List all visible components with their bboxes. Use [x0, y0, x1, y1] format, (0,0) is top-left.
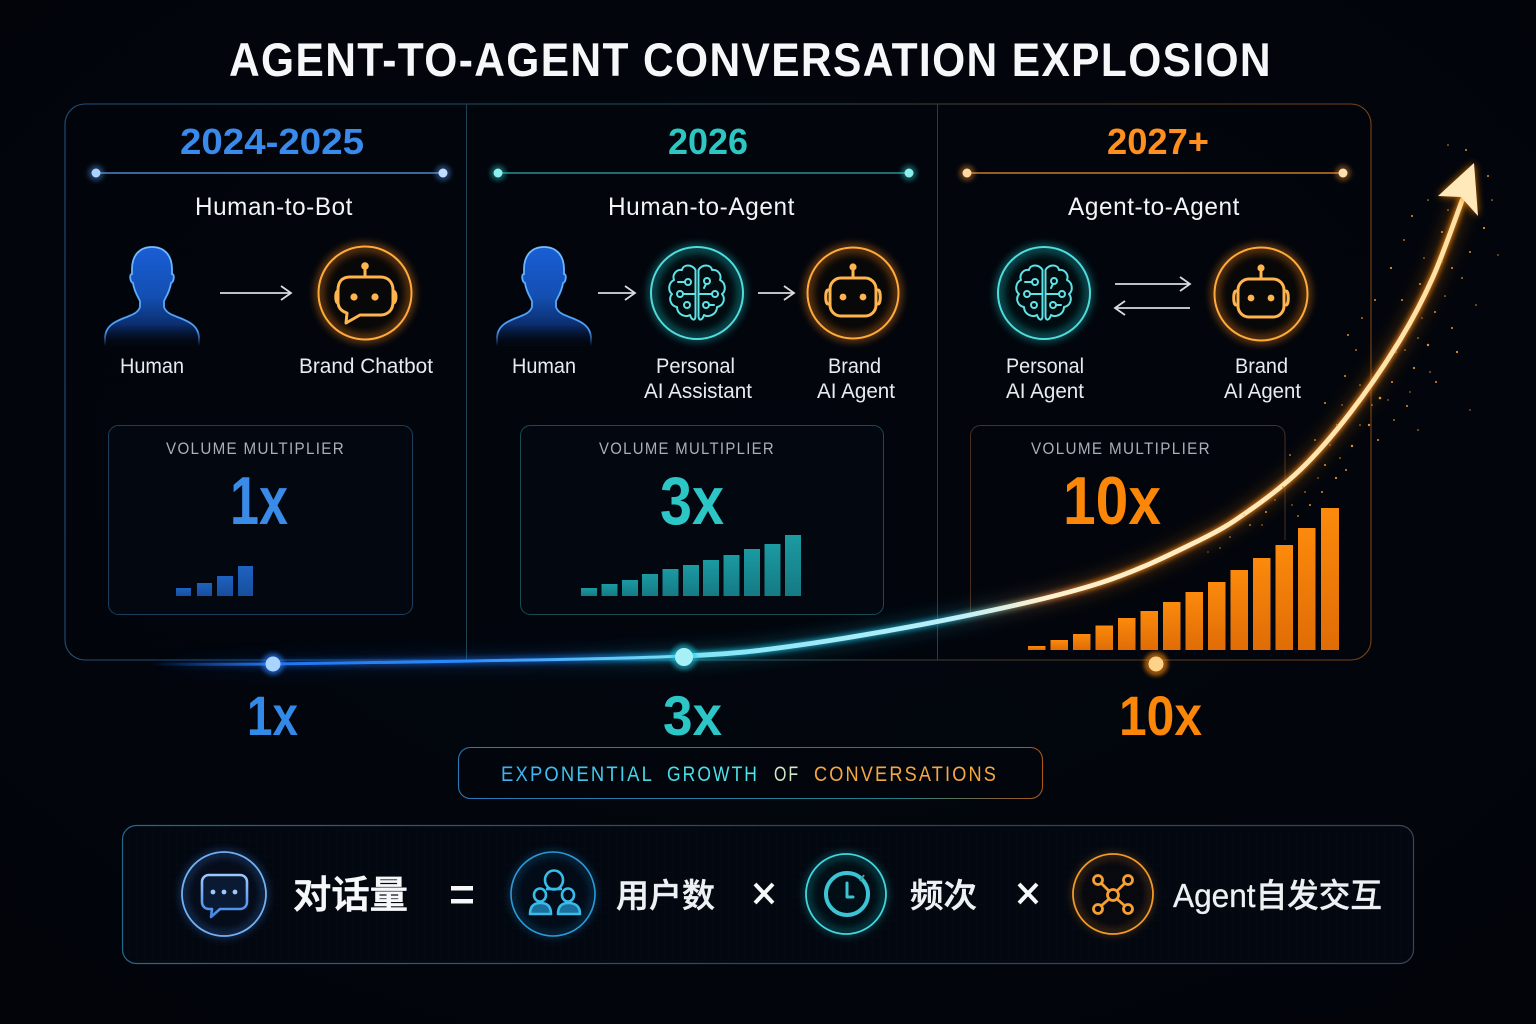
personal agent label: Personal — [1006, 355, 1084, 378]
exponential growth caption: GROWTH — [667, 763, 759, 786]
equals sign — [451, 886, 473, 904]
timeline value 10x: 10x — [1119, 684, 1202, 747]
column divider 2 — [936, 104, 938, 660]
exponential growth curve with arrow — [150, 144, 1499, 664]
year rule with end dots — [490, 165, 917, 181]
title: AGENT-TO-AGENT CONVERSATION EXPLOSION — [229, 33, 1272, 86]
exponential growth caption — [458, 748, 1042, 798]
column divider 1 — [466, 104, 468, 660]
multiplier value: 10x — [1063, 463, 1161, 539]
multiplier value: 1x — [230, 463, 288, 539]
bar chart — [176, 566, 253, 596]
icon: chat bubble — [182, 852, 266, 936]
icon: users — [511, 852, 595, 936]
arrow: human to chatbot — [220, 286, 291, 300]
volume multiplier card — [520, 426, 884, 614]
assistant label: Personal — [656, 355, 735, 378]
icon: personal AI assistant — [651, 247, 743, 339]
multiply sign — [755, 884, 773, 903]
bar chart — [1028, 508, 1339, 650]
timeline marker 1x — [262, 653, 284, 675]
brand agent label: AI Agent — [1224, 380, 1301, 403]
year heading: 2024-2025 — [180, 121, 364, 162]
icon: agent network — [1073, 854, 1153, 934]
arrow: assistant to agent — [758, 286, 794, 300]
formula panel — [122, 826, 1414, 964]
timeline marker 3x — [671, 644, 697, 670]
agent label: Brand — [828, 355, 881, 378]
card label: VOLUME MULTIPLIER — [166, 439, 345, 458]
brand agent label: Brand — [1235, 355, 1288, 378]
icon: brand AI agent — [1214, 247, 1308, 341]
bar chart — [581, 535, 801, 596]
model subtitle: Human-to-Bot — [195, 193, 353, 221]
arrows: two-way exchange — [1115, 277, 1190, 315]
sparks — [1207, 144, 1499, 553]
multiply sign — [1019, 884, 1037, 903]
year heading: 2026 — [668, 121, 748, 162]
multiplier value: 3x — [660, 463, 724, 539]
icon: clock — [806, 854, 886, 934]
agent label: AI Agent — [817, 380, 895, 403]
panel: 2024-2025 Human-to-Bot — [88, 121, 451, 614]
year heading: 2027+ — [1107, 121, 1209, 162]
exponential growth caption: EXPONENTIAL — [501, 763, 654, 786]
panel: 2027+ Agent-to-Agent — [959, 121, 1351, 650]
model subtitle: Human-to-Agent — [608, 193, 795, 221]
icon: personal AI agent — [998, 247, 1090, 339]
formula term: conversation volume: 对话量 — [293, 875, 408, 917]
human label: Human — [512, 355, 576, 378]
exponential growth caption: OF — [774, 763, 800, 786]
chatbot label: Brand Chatbot — [299, 355, 433, 378]
icon: brand AI agent — [807, 247, 899, 339]
human label: Human — [120, 355, 184, 378]
timeline value 1x: 1x — [247, 684, 298, 747]
volume multiplier card — [970, 426, 1339, 650]
timeline panel frame — [65, 104, 1371, 660]
assistant label: AI Assistant — [644, 380, 752, 403]
formula term: users: 用户数 — [616, 877, 715, 914]
timeline value 3x: 3x — [663, 684, 722, 747]
icon: human — [105, 247, 199, 346]
card label: VOLUME MULTIPLIER — [1031, 439, 1211, 458]
volume multiplier card — [108, 426, 412, 614]
arrowhead — [1438, 163, 1478, 216]
card label: VOLUME MULTIPLIER — [599, 439, 775, 458]
model subtitle: Agent-to-Agent — [1068, 193, 1240, 221]
formula term: agent self-initiated interaction: Agent自发交互 — [1173, 877, 1382, 914]
year rule with end dots — [88, 165, 451, 181]
timeline marker 10x — [1144, 652, 1168, 676]
arrow: human to assistant — [598, 286, 635, 300]
icon: brand chatbot — [318, 246, 412, 340]
icon: human — [497, 247, 591, 346]
formula term: frequency: 频次 — [910, 877, 977, 914]
panel: 2026 Human-to-Agent — [490, 121, 917, 614]
personal agent label: AI Agent — [1006, 380, 1084, 403]
exponential growth caption: CONVERSATIONS — [814, 763, 998, 786]
year rule with end dots — [959, 165, 1351, 181]
